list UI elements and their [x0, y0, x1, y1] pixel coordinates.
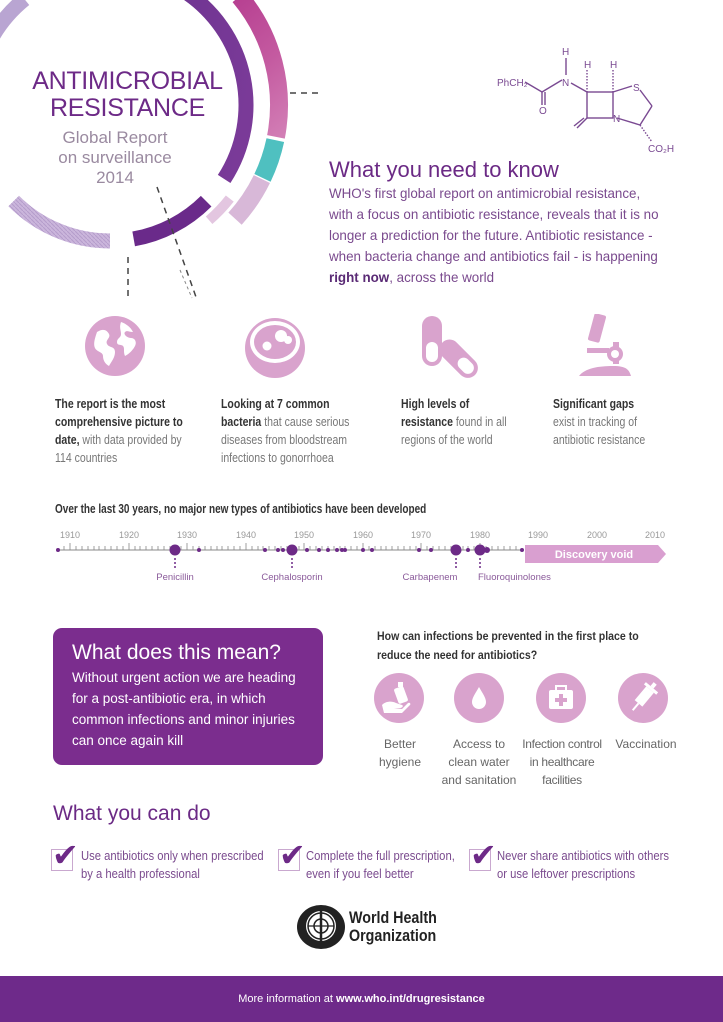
molecule diagram: H — [562, 47, 569, 58]
timeline chart: 2010 — [645, 530, 665, 540]
prevention labels: facilities — [542, 773, 582, 787]
text block: report: date, with data provided by — [55, 433, 182, 447]
timeline chart: 1910 — [60, 530, 80, 540]
molecule diagram: H — [584, 60, 591, 71]
prevention labels: Vaccination — [615, 737, 677, 751]
prevention labels: Infection control — [522, 737, 602, 751]
check: full prescription: even if you feel better — [306, 867, 414, 881]
prevention heading: How can infections be prevented in the first place to — [377, 629, 639, 643]
molecule diagram: CO₂H — [648, 144, 674, 155]
text block: resistance — [401, 397, 507, 447]
intro text: WHO's first global report on antimicrobial resistance, — [329, 186, 640, 201]
text block: report: 114 countries — [55, 451, 117, 465]
text block: report — [55, 397, 183, 465]
molecule diagram: N — [613, 114, 620, 125]
check: never share: or use leftover prescriptions — [497, 867, 635, 881]
text block: report: The report is the most — [55, 397, 165, 411]
timeline chart: 1950 — [294, 530, 314, 540]
prevention labels: in healthcare — [530, 755, 594, 769]
timeline chart: Fluoroquinolones — [478, 572, 551, 583]
intro text: when bacteria change and antibiotics fail - is happening — [329, 249, 658, 264]
text block: resistance: resistance found in all — [401, 415, 507, 429]
text block: bacteria: bacteria that cause serious — [221, 415, 349, 429]
title: RESISTANCE — [50, 94, 205, 122]
heading: what you need to know: What you need to know — [329, 157, 559, 182]
text block: bacteria: infections to gonorrhoea — [221, 451, 334, 465]
check: full prescription: Complete the full prescription, — [306, 849, 455, 863]
intro text: with a focus on antibiotic resistance, reveals that it is no — [329, 207, 659, 222]
molecule diagram — [497, 47, 674, 155]
subtitle: 2014 — [96, 168, 134, 187]
text block: bacteria: Looking at 7 common — [221, 397, 330, 411]
text block: bacteria: diseases from bloodstream — [221, 433, 347, 447]
check: never share: Never share antibiotics with others — [497, 849, 669, 863]
prevention labels: and sanitation — [442, 773, 516, 787]
timeline chart: Carbapenem — [403, 572, 458, 583]
timeline chart: 1970 — [411, 530, 431, 540]
heading: what you can do: What you can do — [53, 802, 211, 825]
molecule diagram: N — [562, 78, 569, 89]
timeline chart — [56, 530, 666, 583]
timeline heading: Over the last 30 years, no major new types of antibiotics have been developed — [55, 502, 426, 516]
prevention heading — [377, 629, 639, 662]
timeline chart: 1930 — [177, 530, 197, 540]
prevention heading: reduce the need for antibiotics? — [377, 648, 537, 662]
timeline chart: Penicillin — [156, 572, 194, 583]
molecule diagram: S — [633, 83, 640, 94]
prevention labels: clean water — [448, 755, 510, 769]
icon: water drop — [454, 673, 504, 723]
molecule diagram: H — [610, 60, 617, 71]
intro text: longer a prediction for the future. Antibiotic resistance - — [329, 228, 653, 243]
icon: globe — [85, 316, 145, 376]
timeline chart: Discovery void — [555, 549, 633, 561]
subtitle: on surveillance — [58, 148, 172, 167]
text block: bacteria — [221, 397, 349, 465]
icon: petri dish — [245, 318, 305, 378]
intro text — [329, 186, 659, 285]
check: prescribed: ✔ — [52, 836, 79, 874]
timeline chart: 1920 — [119, 530, 139, 540]
icon: microscope — [579, 314, 631, 376]
molecule diagram: O — [539, 106, 547, 117]
text block: resistance: regions of the world — [401, 433, 493, 447]
title — [32, 67, 223, 122]
molecule diagram: PhCH₂ — [497, 78, 528, 89]
icon: medical kit — [536, 673, 586, 723]
text block: gaps: Significant gaps — [553, 397, 634, 411]
timeline chart: 1980 — [470, 530, 490, 540]
intro text: right now, across the world — [329, 270, 494, 285]
action items — [51, 836, 669, 881]
WHO logo — [297, 905, 437, 949]
timeline chart: 2000 — [587, 530, 607, 540]
text block: resistance: High levels of — [401, 397, 469, 411]
timeline chart: 1940 — [236, 530, 256, 540]
subtitle — [58, 128, 172, 187]
subtitle: Global Report — [63, 128, 167, 147]
icon: hygiene — [374, 673, 424, 723]
icon: syringe — [618, 673, 668, 723]
panel heading: What does this mean? — [72, 641, 281, 664]
footer: More information at www.who.int/drugresistance — [238, 993, 485, 1005]
timeline chart: 1960 — [353, 530, 373, 540]
prevention labels: Better — [384, 737, 416, 751]
check: full prescription — [278, 836, 455, 881]
header ring graphic — [0, 0, 318, 298]
WHO logo: World Health — [349, 908, 437, 927]
check: prescribed: by a health professional — [81, 867, 200, 881]
check: never share — [469, 836, 669, 881]
footer — [0, 976, 723, 1022]
text block: gaps — [553, 397, 645, 447]
prevention labels: hygiene — [379, 755, 421, 769]
timeline chart: Cephalosporin — [261, 572, 323, 583]
check: full prescription: ✔ — [279, 836, 306, 874]
check: never share: ✔ — [470, 836, 497, 874]
timeline chart: 1990 — [528, 530, 548, 540]
title: ANTIMICROBIAL — [32, 67, 223, 95]
prevention labels — [379, 737, 677, 787]
icon: pills — [422, 316, 478, 378]
panel: what does this mean — [53, 628, 323, 765]
check: prescribed — [51, 836, 264, 881]
WHO logo: Organization — [349, 926, 436, 945]
text block: gaps: antibiotic resistance — [553, 433, 645, 447]
prevention labels: Access to — [453, 737, 505, 751]
text block: report: comprehensive picture to — [55, 415, 183, 429]
text block: gaps: exist in tracking of — [553, 415, 637, 429]
check: prescribed: Use antibiotics only when prescribed — [81, 849, 264, 863]
panel text: Without urgent action we are heading for a post-antibiotic era, in which common infections and minor injuries can once again kill — [72, 670, 296, 748]
